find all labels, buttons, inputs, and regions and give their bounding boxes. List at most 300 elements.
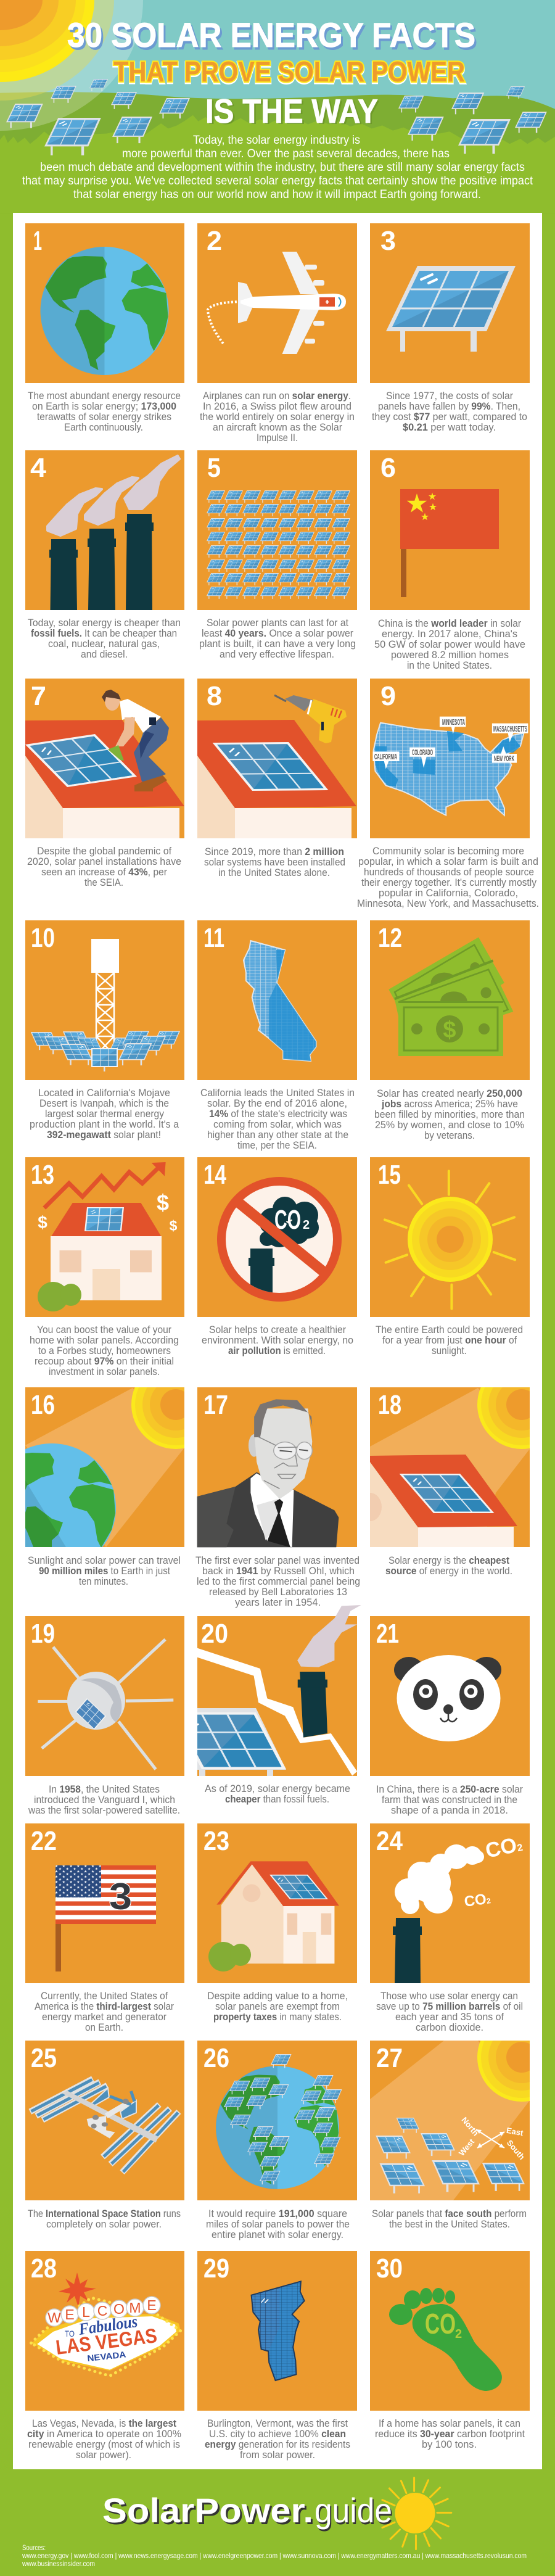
caption — [30, 1088, 179, 1141]
caption: environment. With solar energy, no — [202, 1335, 353, 1346]
caption: 2020, solar panel installations have — [27, 856, 181, 867]
caption: sunlight. — [432, 1345, 467, 1356]
icon: green footprint — [389, 2288, 502, 2391]
caption: and very effective lifespan. — [220, 649, 334, 660]
image tile — [25, 223, 184, 383]
title line 3: IS THE WAY — [205, 92, 378, 130]
icon: Las Vegas sign: O — [113, 2301, 125, 2317]
caption: Since 1977, the costs of solar — [386, 390, 513, 402]
caption: In 2016, a Swiss pilot flew around — [203, 401, 352, 412]
caption: Burlington, Vermont, was the first — [207, 2418, 348, 2429]
image tile — [370, 920, 530, 1080]
icon: Las Vegas sign: E — [147, 2297, 157, 2313]
number: 22 — [31, 1826, 57, 1856]
caption — [376, 1991, 523, 2033]
caption: China is the world leader in solar — [378, 618, 521, 629]
image tile — [370, 1157, 530, 1317]
caption: Community solar is becoming more — [372, 846, 524, 857]
image tile — [25, 1387, 184, 1547]
image tile — [197, 2041, 357, 2200]
number: 6 — [380, 453, 396, 483]
image tile — [370, 1823, 530, 1983]
caption — [374, 618, 525, 671]
icon: green footprint: CO — [425, 2308, 456, 2340]
image tile — [25, 1616, 184, 1776]
caption: in the United States alone. — [218, 867, 330, 878]
image tile — [197, 450, 357, 610]
caption: city in America to operate on 100% — [27, 2429, 181, 2440]
title line 3: IS THE WAY — [207, 93, 380, 131]
number: 28 — [31, 2253, 57, 2284]
icon: US map: MINNESOTA — [442, 718, 465, 727]
caption: energy. In 2017 alone, China's — [382, 629, 517, 640]
caption: they cost $77 per watt, compared to — [372, 411, 527, 423]
intro paragraph: been much debate and development within the industry, but there are still many solar energy facts — [40, 161, 525, 174]
icon: Las Vegas sign: Fabulous — [77, 2312, 139, 2339]
panel: fact 8 — [197, 679, 357, 878]
icon: logo sun — [382, 2478, 451, 2549]
caption — [28, 617, 181, 660]
caption: 25% by women, and close to 10% — [375, 1120, 524, 1131]
caption: jobs across America; 25% have — [381, 1099, 518, 1110]
number: 30 — [376, 2253, 403, 2284]
back hill — [0, 92, 555, 214]
caption: terawatts of solar energy strikes — [37, 411, 171, 423]
caption: home with solar panels. According — [30, 1335, 179, 1346]
title line 2: THAT PROVE SOLAR POWER — [113, 57, 465, 89]
caption: Minnesota, New York, and Massachusetts. — [357, 898, 539, 909]
icon: south-facing panels: South — [505, 2138, 527, 2161]
caption: California leads the United States in — [200, 1088, 355, 1099]
caption — [375, 2418, 525, 2450]
title line 1: 30 SOLAR ENERGY FACTS — [69, 18, 477, 57]
caption: by veterans. — [424, 1130, 475, 1141]
caption — [28, 2208, 181, 2230]
caption: popular in California, Colorado, — [379, 888, 518, 899]
number: 13 — [31, 1160, 54, 1190]
caption: source of energy in the world. — [385, 1566, 512, 1577]
caption — [376, 1324, 523, 1356]
image tile — [25, 1157, 184, 1317]
icon: no air pollution: CO — [274, 1205, 301, 1235]
caption: introduced the Vanguard I, which — [34, 1794, 175, 1806]
icon: Las Vegas sign: NEVADA — [87, 2349, 126, 2363]
icon: no air pollution — [217, 1177, 342, 1302]
number: 27 — [376, 2043, 403, 2073]
caption — [207, 1991, 348, 2023]
image tile — [25, 920, 184, 1080]
image tile — [370, 2251, 530, 2411]
caption — [205, 1783, 350, 1805]
caption: on Earth is solar energy; 173,000 — [32, 401, 176, 412]
icon: US map: NEW YORK — [494, 754, 514, 763]
number: 3 — [380, 226, 396, 256]
icon: solar airplane — [208, 252, 346, 354]
panel: fact 3 — [370, 223, 530, 433]
icon: earth covered with panels — [216, 2054, 342, 2189]
caption: In 1958, the United States — [49, 1784, 160, 1795]
caption — [28, 1555, 181, 1587]
caption: Solar energy is the cheapest — [388, 1555, 509, 1566]
footer — [22, 2478, 527, 2568]
sources: Sources: — [22, 2543, 46, 2552]
caption: As of 2019, solar energy became — [205, 1783, 350, 1794]
image tile — [370, 1387, 530, 1547]
caption: It would require 191,000 square — [208, 2208, 347, 2219]
caption: Las Vegas, Nevada, is the largest — [32, 2418, 176, 2429]
image tile — [370, 2041, 530, 2200]
panel: fact 28 — [25, 2251, 184, 2461]
caption — [205, 2418, 350, 2461]
icon: south-facing panels: North — [460, 2115, 480, 2137]
caption: Located in California's Mojave — [38, 1088, 170, 1099]
caption — [204, 846, 345, 878]
image tile — [25, 450, 184, 610]
caption: Solar helps to create a healthier — [209, 1324, 346, 1335]
caption: the SEIA. — [84, 877, 123, 888]
image tile — [197, 1157, 357, 1317]
caption: coal, nuclear, natural gas, — [48, 638, 160, 650]
caption — [195, 1555, 360, 1608]
caption: Sunlight and solar power can travel — [28, 1555, 181, 1566]
icon: International Space Station — [30, 2079, 179, 2173]
caption: higher than any other state at the — [207, 1129, 348, 1141]
panel: fact 15 — [370, 1157, 530, 1356]
caption — [372, 2208, 527, 2230]
caption: entire planet with solar energy. — [212, 2229, 343, 2240]
caption — [27, 2418, 181, 2461]
caption: Desert is Ivanpah, which is the — [39, 1098, 169, 1109]
caption: Despite the global pandemic of — [37, 846, 171, 857]
sources: www.businessinsider.com — [22, 2559, 95, 2568]
number: 21 — [376, 1619, 399, 1649]
caption: Currently, the United States of — [41, 1991, 168, 2002]
caption: If a home has solar panels, it can — [379, 2418, 520, 2429]
logo wordmark: SolarPower. — [104, 2493, 315, 2532]
icon: south-facing panels: East — [506, 2126, 524, 2137]
number: 24 — [376, 1826, 403, 1856]
caption: investment in solar panels. — [49, 1366, 160, 1377]
number: 5 — [207, 453, 221, 483]
caption — [30, 1324, 179, 1377]
hero banner — [0, 0, 555, 214]
icon: Las Vegas sign: LAS VEGAS — [54, 2324, 158, 2359]
caption: $0.21 per watt today. — [403, 422, 496, 433]
intro paragraph: that solar energy has on our world now and how it will impact Earth going forward. — [73, 188, 481, 201]
image tile — [25, 1823, 184, 1983]
icon: dollar bills — [388, 937, 513, 1056]
number: 12 — [378, 923, 402, 953]
icon: roof installer — [25, 690, 184, 838]
panel: fact 2 — [197, 223, 357, 444]
caption: coming from solar, which was — [213, 1119, 342, 1130]
number: 23 — [204, 1826, 229, 1856]
icon: Las Vegas sign: E — [65, 2306, 75, 2322]
caption: Earth continuously. — [64, 422, 143, 433]
number: 20 — [201, 1619, 228, 1649]
panel: fact 7 — [25, 679, 184, 888]
image tile — [197, 1823, 357, 1983]
panel: fact 9 — [357, 679, 539, 909]
caption: air pollution is emitted. — [228, 1345, 326, 1356]
icon: sun — [0, 0, 143, 131]
panel: fact 5 — [197, 450, 357, 660]
caption: from solar power. — [240, 2450, 315, 2461]
image tile — [370, 450, 530, 610]
caption: solar power). — [76, 2450, 131, 2461]
caption: their energy together. It's currently mostly — [361, 877, 537, 888]
caption: Since 2019, more than 2 million — [205, 846, 344, 857]
caption: The entire Earth could be powered — [376, 1324, 523, 1335]
caption: Solar has created nearly 250,000 — [377, 1088, 522, 1099]
caption: reduce its 30-year carbon footprint — [375, 2429, 525, 2440]
panel: fact 30 — [370, 2251, 530, 2450]
image tile — [370, 223, 530, 383]
icon: panda — [394, 1655, 501, 1741]
caption: the best in the United States. — [389, 2219, 510, 2230]
icon: house with rising value: $ — [38, 1213, 47, 1232]
caption: shape of a panda in 2018. — [391, 1805, 508, 1816]
caption: 392-megawatt solar plant! — [47, 1129, 161, 1141]
caption: property taxes in many states. — [213, 2012, 342, 2023]
icon: solar tower — [31, 939, 180, 1071]
icon: US flag: 3 — [109, 1876, 132, 1917]
icon: sun with rays — [385, 1171, 515, 1309]
caption: fossil fuels. It can be cheaper than — [31, 628, 177, 639]
logo wordmark — [102, 2491, 393, 2532]
caption: by 100 tons. — [422, 2439, 477, 2450]
caption: to a Forbes study, homeowners — [38, 1345, 171, 1356]
caption: completely on solar power. — [46, 2219, 162, 2230]
image tile — [25, 2251, 184, 2411]
caption — [206, 2208, 350, 2240]
title line 1: 30 SOLAR ENERGY FACTS — [67, 15, 475, 54]
caption: energy market and generator — [42, 2012, 166, 2023]
caption: energy generation for its residents — [205, 2439, 350, 2450]
panel: fact 25 — [25, 2041, 184, 2230]
panel: fact 26 — [197, 2041, 357, 2240]
image tile — [197, 2251, 357, 2411]
caption: The International Space Station runs — [28, 2208, 181, 2219]
caption: Impulse II. — [257, 432, 298, 444]
logo wordmark: guide — [316, 2493, 393, 2532]
icon: smokestacks — [47, 456, 179, 610]
caption: renewable energy (most of which is — [28, 2439, 180, 2450]
panel: fact 22 — [25, 1823, 184, 2033]
icon: Las Vegas sign: L — [82, 2304, 90, 2320]
number: 26 — [204, 2043, 229, 2073]
icon: carbon dioxide smoke: CO2 — [483, 1832, 524, 1863]
icon: carbon dioxide smoke — [393, 1832, 524, 1983]
number: 10 — [31, 923, 55, 953]
number: 18 — [378, 1390, 401, 1420]
panel: fact 13 — [25, 1157, 184, 1377]
panel: fact 16 — [25, 1387, 184, 1585]
logo wordmark: guide — [314, 2491, 392, 2530]
icon: Las Vegas sign — [31, 2273, 181, 2376]
panel: fact 21 — [370, 1616, 530, 1816]
foreground grass — [0, 115, 555, 214]
panel: fact 14 — [197, 1157, 357, 1356]
caption: Those who use solar energy can — [380, 1991, 518, 2002]
number: 2 — [207, 226, 222, 256]
image tile — [197, 679, 357, 838]
icon: US map — [372, 717, 528, 815]
sky — [0, 0, 555, 213]
caption: in the United States. — [407, 660, 492, 671]
icon: house with rising value: $ — [157, 1190, 169, 1215]
number: 4 — [30, 453, 47, 483]
panel: fact 6 — [370, 450, 530, 671]
caption: popular, in which a solar farm is built and — [358, 856, 538, 867]
caption: farm that was constructed in the — [382, 1794, 517, 1806]
caption: solar. By the end of 2016 alone, — [207, 1098, 347, 1109]
logo wordmark: SolarPower. — [102, 2491, 313, 2530]
icon: sun over roof panels — [370, 1387, 530, 1547]
number: 29 — [204, 2253, 229, 2284]
caption: miles of solar panels to power the — [206, 2219, 350, 2230]
caption: In China, there is a 250-acre solar — [376, 1784, 523, 1795]
icon: south-facing panels: West — [457, 2137, 477, 2158]
panel: fact 10 — [25, 920, 184, 1141]
caption — [200, 1088, 355, 1151]
icon: Vermont map — [252, 2281, 305, 2380]
caption: on Earth. — [85, 2022, 123, 2033]
caption: largest solar thermal energy — [45, 1108, 165, 1120]
caption: each year and 35 tons of — [395, 2012, 504, 2023]
caption: Despite adding value to a home, — [207, 1991, 348, 2002]
image tile — [370, 1616, 530, 1776]
caption: solar panels are exempt from — [215, 2001, 340, 2012]
icon: China flag — [400, 489, 499, 597]
caption — [376, 1784, 523, 1816]
icon: Las Vegas sign: M — [129, 2300, 141, 2316]
caption — [385, 1555, 512, 1577]
caption — [199, 617, 356, 660]
caption — [202, 1324, 353, 1356]
caption: ten minutes. — [79, 1576, 128, 1587]
caption — [28, 1784, 180, 1816]
caption: the world entirely on solar energy in — [200, 411, 355, 423]
icon: Las Vegas sign: TO — [65, 2329, 75, 2339]
caption: powered 8.2 million homes — [391, 650, 509, 661]
caption: Solar power plants can last for at — [207, 617, 348, 629]
caption: 50 GW of solar power would have — [374, 639, 525, 650]
number: 9 — [380, 681, 396, 711]
caption: U.S. city to achieve 100% clean — [209, 2429, 346, 2440]
icon: house with solar panels — [208, 1861, 339, 1971]
intro paragraph: Today, the solar energy industry is — [193, 134, 360, 147]
panel: fact 23 — [197, 1823, 357, 2023]
number: 11 — [204, 923, 224, 953]
caption: 14% of the state's electricity was — [209, 1108, 347, 1120]
image tile — [370, 679, 530, 838]
back solar panels — [6, 79, 525, 128]
image tile — [25, 679, 184, 838]
caption: released by Bell Laboratories 13 — [209, 1587, 347, 1598]
icon: carbon dioxide smoke: CO2 — [463, 1890, 491, 1910]
icon: sunlight reaching earth — [25, 1387, 184, 1547]
caption: for a year from just one hour of — [382, 1335, 517, 1346]
image tile — [197, 1616, 357, 1776]
caption: hundreds of thousands of people source — [364, 867, 534, 878]
caption: panels have fallen by 99%. Then, — [378, 401, 520, 412]
icon: house with rising value: $ — [170, 1218, 178, 1234]
caption: and diesel. — [81, 649, 128, 660]
icon: Las Vegas sign: C — [97, 2303, 107, 2319]
caption: Solar panels that face south perform — [372, 2208, 527, 2219]
icon: US map: COLORADO — [412, 748, 433, 757]
caption: years later in 1954. — [235, 1597, 321, 1608]
caption: time, per the SEIA. — [237, 1140, 317, 1151]
front solar panels — [44, 112, 547, 155]
number: 15 — [378, 1160, 401, 1190]
intro paragraph: more powerful than ever. Over the past several decades, there has — [122, 147, 450, 160]
icon: portrait of Russell Ohl — [197, 1399, 339, 1547]
caption: least 40 years. Once a solar power — [202, 628, 353, 639]
icon: house with rising value — [38, 1162, 178, 1311]
number: 1 — [33, 226, 42, 256]
panel: fact 29 — [197, 2251, 357, 2461]
panel: fact 11 — [197, 920, 357, 1151]
icon: US map: CALIFORNIA — [374, 753, 397, 761]
caption: America is the third-largest solar — [35, 2001, 174, 2012]
panel: fact 27 — [370, 2041, 530, 2227]
caption: been filled by minorities, more than — [374, 1109, 525, 1120]
icon: earth — [41, 247, 169, 375]
icon: solar panel array — [207, 490, 350, 599]
icon: solar versus fossil fuels — [197, 1605, 361, 1776]
icon: solar panel — [386, 266, 516, 352]
panel: fact 17 — [195, 1387, 360, 1608]
icon: green footprint: 2 — [455, 2327, 462, 2341]
caption — [27, 846, 181, 888]
panel: fact 18 — [370, 1387, 530, 1577]
image tile — [25, 2041, 184, 2200]
icon: dollar bills: $ — [443, 1017, 456, 1043]
caption: back in 1941 by Russell Ohl, which — [202, 1566, 355, 1577]
caption — [374, 1088, 525, 1141]
caption — [28, 390, 181, 433]
caption: The first ever solar panel was invented — [195, 1555, 360, 1566]
image tile — [197, 920, 357, 1080]
image tile — [197, 223, 357, 383]
caption — [200, 390, 355, 444]
title line 2: THAT PROVE SOLAR POWER — [113, 56, 465, 88]
icon: Las Vegas sign: W — [47, 2310, 61, 2326]
panel: fact 12 — [370, 920, 530, 1141]
image tile — [197, 1387, 357, 1547]
caption: led to the first commercial panel being — [197, 1576, 360, 1587]
caption: Airplanes can run on solar energy. — [203, 390, 351, 402]
caption: recoup about 97% on their initial — [35, 1356, 174, 1367]
panel: fact 4 — [25, 450, 184, 660]
number: 7 — [31, 681, 46, 711]
caption: plant is built, it can have a very long — [199, 638, 356, 650]
icon: south-facing panels — [370, 2041, 530, 2200]
icon: US flag — [56, 1865, 156, 1971]
caption: carbon dioxide. — [416, 2022, 483, 2033]
icon: California map — [244, 941, 316, 1061]
caption — [35, 1991, 174, 2033]
caption: production plant in the world. It's a — [30, 1119, 179, 1130]
caption: solar systems have been installed — [204, 857, 345, 868]
caption: save up to 75 million barrels of oil — [376, 2001, 523, 2012]
number: 14 — [204, 1160, 226, 1190]
caption — [357, 846, 539, 909]
sources — [22, 2543, 527, 2568]
number: 25 — [31, 2043, 57, 2073]
